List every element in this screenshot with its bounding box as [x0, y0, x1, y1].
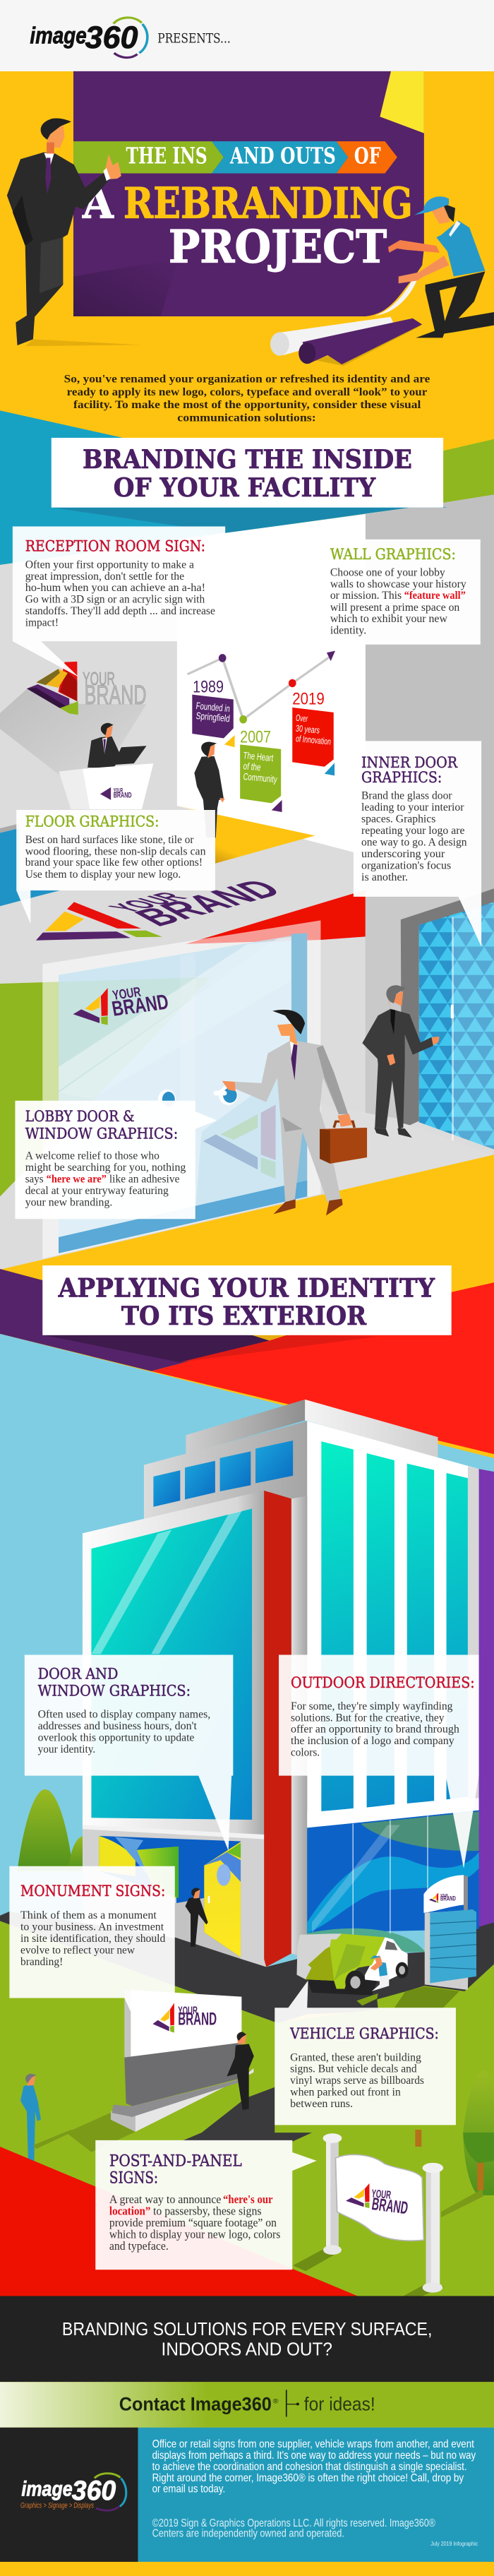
ribbon: the ins and outs of: THE INS	[126, 142, 207, 169]
callout: inner door graphics: underscoring your	[361, 847, 445, 860]
intro paragraph: So, you've renamed your organization or refreshed its identity and are	[64, 373, 430, 385]
exterior heading: TO ITS EXTERIOR	[121, 1301, 367, 1331]
floor logo: BRAND	[124, 874, 293, 931]
timeline 1989: 1989	[193, 678, 224, 696]
callout: reception room sign: great impression, don't settle for the	[25, 570, 184, 583]
callout: lobby door and window graphics: says	[25, 1173, 44, 1185]
callout: inner door graphics: organization's focus	[361, 859, 452, 871]
callout: lobby door and window graphics: your new branding.	[25, 1196, 112, 1208]
timeline chart	[188, 651, 335, 812]
road	[0, 1912, 494, 2024]
title: a rebranding project: A	[82, 179, 114, 228]
directory sign	[423, 1875, 476, 1990]
timeline 1989: Founded in	[195, 700, 231, 715]
interior section heading: OF YOUR FACILITY	[114, 473, 376, 503]
floor logo: YOUR	[100, 890, 195, 915]
logo: image360	[30, 18, 147, 58]
blue info panel: Centers are independently owned and operated.	[152, 2527, 344, 2539]
callout: floor graphics	[16, 810, 215, 924]
intro paragraph: ready to apply its new logo, colors, typeface and overall “look” to your	[67, 386, 428, 398]
callout: door and window graphics	[25, 1655, 233, 1851]
callout: monument signs: in site identification, they should	[20, 1932, 166, 1945]
trees behind	[18, 1789, 102, 1871]
hero section	[7, 18, 494, 424]
floor logo	[36, 874, 293, 941]
black banner: branding solutions	[0, 2296, 494, 2382]
tree trunks and foliage	[415, 2130, 494, 2190]
directory sign: YOUR	[440, 1894, 448, 1898]
timeline 2007: Community	[243, 771, 278, 785]
timeline 2007: of the	[243, 761, 261, 773]
green contact bar: ®	[273, 2398, 279, 2406]
callout: outdoor directories: colors.	[291, 1746, 320, 1758]
exterior ground level	[0, 1789, 494, 2298]
callout: floor graphics: FLOOR GRAPHICS:	[25, 813, 159, 830]
ground floor entrance	[83, 1825, 266, 1979]
man in blue suit	[20, 2074, 41, 2169]
dark logo panel	[0, 2428, 138, 2562]
reception 3D sign	[27, 662, 147, 715]
logo on door: BRAND	[110, 990, 170, 1020]
reception 3D sign: YOUR	[83, 668, 115, 689]
post and panel sign: YOUR	[370, 2187, 392, 2202]
callout: wall graphics: walls to showcase your history	[330, 578, 466, 590]
panel shadow	[73, 258, 178, 316]
man at door	[185, 1888, 208, 1947]
ribbon: the ins and outs of	[73, 141, 397, 174]
timeline 2007: The Heart	[243, 750, 275, 764]
callout: vehicle graphics: VEHICLE GRAPHICS:	[289, 2025, 439, 2042]
title: a rebranding project: PROJECT	[169, 221, 387, 274]
green contact bar: for ideas!	[304, 2394, 375, 2414]
callout: floor graphics: Best on hard surfaces like stone, tile or	[25, 833, 194, 846]
callout: inner door graphics: GRAPHICS:	[361, 769, 442, 786]
callout: post-and-panel signs: and typeface.	[109, 2240, 169, 2253]
monument sign: YOUR	[178, 2004, 198, 2017]
reception 3D sign: BRAND	[85, 679, 147, 710]
timeline 2019: of Innovation	[295, 733, 332, 746]
callout: post-and-panel signs: to passersby, these signs	[153, 2205, 262, 2217]
door handle	[158, 1085, 238, 1109]
wrapped van with installer	[297, 1933, 409, 2005]
worker peeling the panel	[388, 196, 494, 338]
exterior callouts	[25, 1655, 479, 1868]
logo on door: YOUR	[112, 984, 142, 1003]
monument sign: BRAND	[178, 2009, 217, 2029]
receptionist at desk	[88, 723, 147, 768]
black banner: branding solutions: INDOORS AND OUT?	[162, 2339, 332, 2359]
callout: vehicle graphics: Granted, these aren't building	[290, 2051, 421, 2063]
callout: reception room sign: Go with a 3D sign or an acrylic sign with	[25, 593, 205, 605]
interior section heading	[52, 438, 443, 508]
callout: inner door graphics: one way to go. A design	[361, 836, 467, 848]
monument sign	[111, 1990, 253, 2132]
callout: wall graphics: “feature wall”	[404, 589, 466, 602]
intro paragraph: communication solutions:	[177, 411, 316, 424]
presents label: PRESENTS...	[157, 31, 231, 46]
callout: reception room sign: standoffs. They'll add depth ... and increase	[25, 604, 215, 617]
monument shadow	[66, 2113, 135, 2152]
callout: lobby door and window graphics: WINDOW GRAPHICS:	[25, 1125, 178, 1143]
green contact bar: Contact Image360	[119, 2394, 272, 2414]
green wall shape	[0, 977, 211, 1197]
building beam above glass	[307, 1798, 479, 1827]
callout: monument signs: to your business. An investment	[20, 1921, 164, 1933]
man at monument sign	[227, 2032, 254, 2110]
directory sign: BRAND	[440, 1895, 456, 1902]
callout: vehicle graphics	[275, 1981, 456, 2125]
long shadow of reception sign	[0, 689, 147, 797]
callout: monument signs: evolve to reflect your new	[20, 1944, 135, 1956]
callout: inner door graphics: is another.	[361, 871, 408, 883]
callout: reception room sign	[13, 527, 225, 677]
callout: post-and-panel signs: POST-AND-PANEL	[109, 2151, 242, 2170]
exterior heading	[42, 1265, 452, 1335]
callouts: interior	[13, 527, 481, 947]
title: a rebranding project	[82, 179, 413, 274]
blue info panel: July 2019 Infographic	[430, 2541, 478, 2547]
reception desk: YOUR	[114, 787, 123, 794]
callout: floor graphics: wood flooring, these non-slip decals can	[25, 845, 206, 857]
grass	[0, 1921, 494, 2298]
callout: floor graphics: brand your space like few other options!	[25, 856, 203, 868]
callout: vehicle graphics: vinyl wraps serve as billboards	[290, 2074, 424, 2087]
callout: post-and-panel signs: which to display your new logo, colors	[109, 2228, 280, 2241]
backgrounds: interior section	[0, 410, 494, 1303]
callout: outdoor directories: For some, they're simply wayfinding	[291, 1700, 453, 1712]
interior illustration, upper	[0, 651, 335, 837]
callout: lobby door and window graphics	[15, 1101, 217, 1219]
timeline 1989	[192, 678, 235, 747]
sky	[0, 1334, 494, 1988]
callout: reception room sign: ho-hum when you can achieve an a-ha!	[25, 581, 205, 594]
dark logo panel: Graphics > Signage > Displays	[20, 2500, 94, 2510]
callout: inner door graphics: spaces. Graphics	[361, 813, 436, 825]
blue info panel: or email us today.	[152, 2482, 225, 2495]
grass shadow wedge	[394, 1986, 459, 2008]
path shadow stripe	[33, 2130, 74, 2149]
peeled corner top	[380, 71, 424, 133]
ribbon: the ins and outs of: AND OUTS	[229, 142, 336, 169]
callout: outdoor directories	[279, 1655, 479, 1868]
callout: outdoor directories: the inclusion of a logo and company	[291, 1734, 454, 1747]
timeline 1989: Springfield	[195, 710, 231, 724]
ribbon: the ins and outs of: OF	[354, 142, 381, 169]
timeline 2007	[240, 728, 282, 812]
callout: lobby door and window graphics: LOBBY DOOR &	[25, 1108, 135, 1126]
callout: wall graphics: or mission. This	[330, 589, 402, 602]
callout: wall graphics: will present a prime space on	[330, 601, 460, 614]
callout: inner door graphics	[354, 741, 481, 947]
peeled corner bottom	[375, 275, 419, 316]
timeline 2019	[292, 690, 335, 775]
callout: inner door graphics: repeating your logo are	[361, 824, 464, 837]
timeline 2019: Over	[295, 712, 308, 724]
intro paragraph	[64, 373, 430, 424]
building exterior	[83, 1400, 494, 1977]
man viewing timeline	[194, 742, 225, 837]
callout: monument signs	[9, 1866, 175, 2036]
green contact bar	[0, 2382, 494, 2428]
callout: floor graphics: Use them to display your new logo.	[25, 868, 181, 881]
callout: post-and-panel signs: location”	[109, 2205, 150, 2217]
callout: reception room sign: impact!	[25, 616, 59, 628]
closing section	[0, 2130, 494, 2576]
intro paragraph: facility. To make the most of the opportunity, consider these visual	[73, 398, 421, 411]
yellow footer strip	[0, 2562, 494, 2576]
callout: door and window graphics: DOOR AND	[38, 1665, 118, 1683]
callout: monument signs: MONUMENT SIGNS:	[20, 1882, 165, 1900]
interior section heading: BRANDING THE INSIDE	[83, 445, 412, 475]
logo on door	[73, 984, 170, 1025]
dark logo panel: 360	[72, 2474, 116, 2505]
inner door with triangle pattern	[320, 888, 494, 1194]
rolled vinyl rolls	[270, 317, 422, 366]
reception desk: BRAND	[114, 791, 132, 800]
callout: wall graphics	[301, 539, 481, 645]
callout: wall graphics: WALL GRAPHICS:	[330, 546, 456, 564]
red banner	[151, 1282, 494, 1454]
callout: vehicle graphics: signs. But vehicle decals and	[290, 2063, 417, 2075]
callout: inner door graphics: leading to your interior	[361, 801, 464, 813]
exterior section: sky and banners	[0, 1265, 494, 1988]
callout: outdoor directories: solutions. But for the creative, they	[291, 1711, 445, 1724]
callout: lobby door and window graphics: “here we are”	[47, 1173, 107, 1185]
callout: post-and-panel signs: SIGNS:	[109, 2169, 158, 2187]
tree at lower right	[463, 2071, 494, 2195]
man at inner door	[362, 985, 440, 1138]
callout: reception room sign: RECEPTION ROOM SIGN:	[25, 537, 205, 555]
walkway road	[181, 2087, 312, 2141]
glass lobby door	[42, 920, 320, 1259]
callout: wall graphics: which to exhibit your new	[330, 612, 448, 625]
red ground wedge	[0, 2147, 358, 2296]
ground floor glass wall	[307, 1811, 479, 1952]
timeline 2019: 2019	[292, 690, 325, 708]
top header band background	[0, 0, 494, 71]
purple banner	[0, 1269, 270, 1371]
post and panel sign	[293, 2133, 483, 2296]
interior illustration, lower	[0, 874, 494, 1483]
callout: post-and-panel signs	[95, 2140, 317, 2270]
callout: monument signs: Think of them as a monument	[20, 1909, 157, 1921]
callout: door and window graphics: overlook this opportunity to update	[38, 1731, 194, 1743]
callout: wall graphics: identity.	[330, 624, 366, 636]
callout: lobby door and window graphics: might be searching for you, nothing	[25, 1161, 186, 1174]
blue info panel	[138, 2428, 494, 2562]
dark logo panel: image	[21, 2477, 73, 2500]
callout: wall graphics: Choose one of your lobby	[330, 566, 445, 578]
timeline 2019: 30 years	[295, 723, 320, 735]
callout: door and window graphics: your identity.	[38, 1743, 95, 1755]
callout: lobby door and window graphics: decal at your entryway featuring	[25, 1184, 169, 1197]
reception desk	[59, 763, 153, 809]
callout: post-and-panel signs: “here's our	[223, 2193, 273, 2206]
callout: inner door graphics: Brand the glass door	[361, 789, 452, 801]
callout: outdoor directories: offer an opportunity to brand through	[291, 1723, 459, 1735]
callout: reception room sign: Often your first opportunity to make a	[25, 559, 194, 571]
yellow floor foreground	[0, 1155, 494, 1483]
callout: inner door graphics: INNER DOOR	[361, 754, 458, 771]
callout: monument signs: branding!	[20, 1955, 63, 1967]
post and panel sign: BRAND	[370, 2193, 409, 2218]
callout: door and window graphics: addresses and business hours, don't	[38, 1719, 197, 1732]
callout: post-and-panel signs: A great way to announce	[109, 2193, 222, 2206]
callout: lobby door and window graphics: like an adhesive	[109, 1173, 179, 1185]
callout: vehicle graphics: when parked out front in	[290, 2086, 401, 2098]
callout: lobby door and window graphics: A welcome relief to those who	[25, 1150, 159, 1162]
logo: image360: 360	[85, 20, 138, 55]
callout: vehicle graphics: between runs.	[290, 2097, 353, 2110]
timeline 2007: 2007	[240, 728, 271, 746]
callout: post-and-panel signs: provide premium “square footage” on	[109, 2217, 277, 2229]
logo: image360: image	[30, 22, 87, 49]
red wall shape	[186, 890, 366, 944]
man in grey suit with briefcase	[222, 1010, 367, 1215]
callout: door and window graphics: WINDOW GRAPHICS:	[38, 1682, 191, 1700]
purple title panel	[73, 71, 424, 316]
callout: door and window graphics: Often used to display company names,	[38, 1708, 210, 1720]
man in black suit	[7, 119, 142, 346]
